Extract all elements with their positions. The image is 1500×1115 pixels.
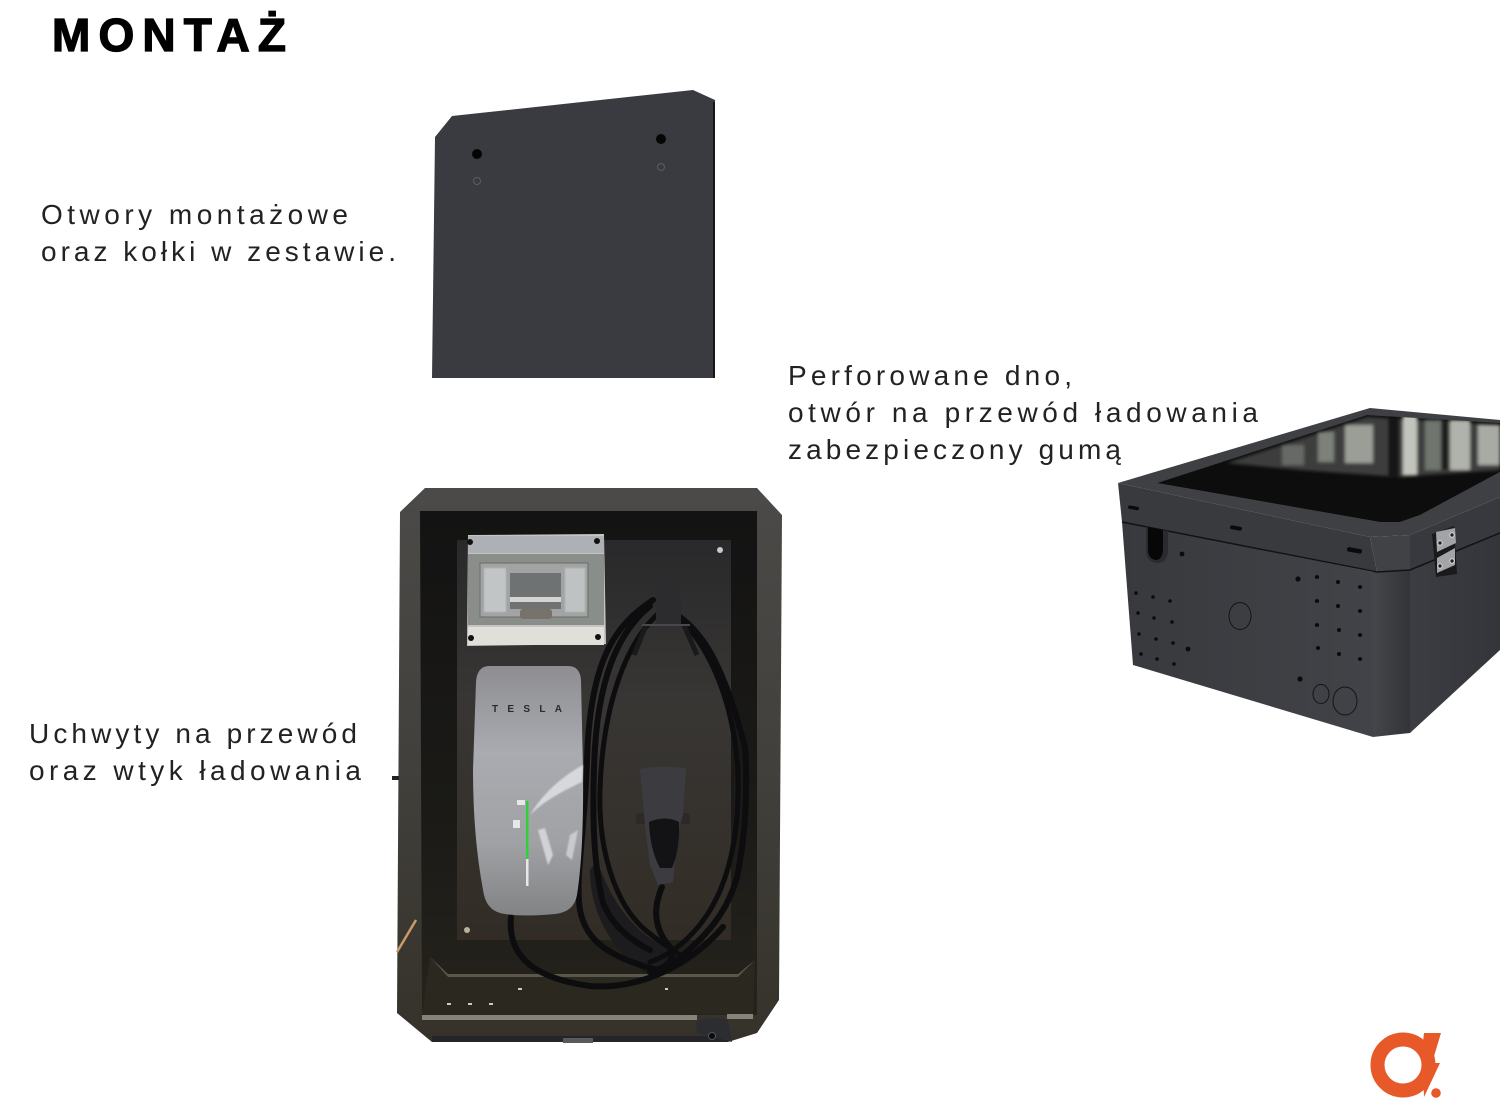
back panel with mounting holes bbox=[432, 90, 715, 378]
text block: perforated bottom bbox=[788, 360, 1258, 465]
Tesla wall charger bbox=[473, 666, 583, 916]
open cabinet with charger bbox=[397, 488, 782, 1043]
cabinet floor bbox=[422, 957, 755, 1043]
text block: cable holders bbox=[29, 718, 361, 786]
cable slot bbox=[1146, 527, 1168, 563]
text block: mounting holes: oraz kołki w zestawie. bbox=[41, 236, 396, 267]
box lid bbox=[1118, 408, 1500, 572]
lid glass bbox=[1157, 415, 1500, 522]
pointer tick bbox=[392, 776, 399, 780]
box right face bbox=[1410, 533, 1500, 733]
mounting screws bbox=[464, 547, 724, 933]
text block: perforated bottom: zabezpieczony gumą bbox=[788, 434, 1121, 465]
breaker box bbox=[467, 534, 606, 646]
charging connector bbox=[636, 767, 690, 885]
cabinet back plate bbox=[457, 540, 731, 940]
knockout circles bbox=[1229, 602, 1357, 715]
text block: cable holders: Uchwyty na przewód bbox=[29, 718, 357, 749]
hinges bbox=[1432, 526, 1457, 577]
box with perforated bottom bbox=[1118, 408, 1500, 737]
box front face bbox=[1122, 522, 1373, 737]
box corner bbox=[1373, 570, 1410, 737]
charger logo: TESLA bbox=[492, 704, 562, 715]
text block: perforated bottom: otwór na przewód ładowania bbox=[788, 397, 1258, 428]
perforation holes bbox=[1134, 552, 1362, 682]
cabinet interior bbox=[420, 511, 757, 1015]
cabinet frame bbox=[397, 488, 782, 1042]
logo bbox=[1378, 1033, 1441, 1098]
text block: mounting holes: Otwory montażowe bbox=[41, 199, 348, 230]
title: MONTAŻ bbox=[52, 9, 286, 61]
text block: perforated bottom: Perforowane dno, bbox=[788, 360, 1072, 391]
text block: cable holders: oraz wtyk ładowania bbox=[29, 755, 361, 786]
lid slots bbox=[1128, 505, 1362, 554]
text block: mounting holes bbox=[41, 199, 396, 267]
charging cable bbox=[511, 600, 746, 986]
orange wire bbox=[397, 920, 416, 952]
cable hook bbox=[634, 581, 697, 655]
charger status light bbox=[526, 801, 528, 859]
